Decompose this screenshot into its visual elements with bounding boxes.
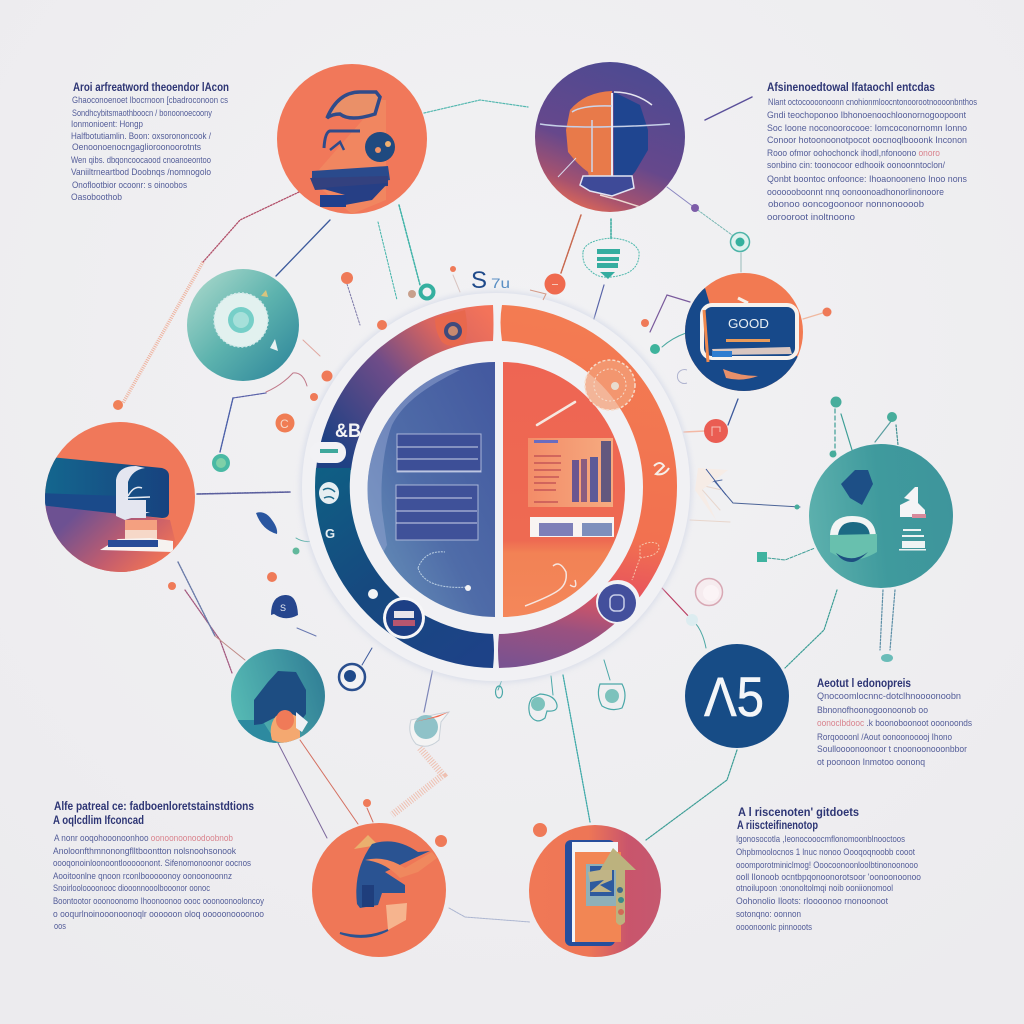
- text: lower left block: [53, 801, 264, 932]
- icon: egg bubble: [410, 712, 449, 746]
- dome device: [830, 516, 877, 562]
- text: lower left block: Alfe patreal ce: fadboenloretstainstdtions: [54, 801, 254, 813]
- text: top left block: Vaniiltrneartbod Doobnqs /nomnogolo: [71, 167, 211, 178]
- text: top left block: Oasoboothob: [71, 192, 122, 203]
- text: top right block: Nlant octocoooonoonn cnohionmloocntonoorootnoooonbnthos: [768, 97, 977, 108]
- icon: flower on ring: [585, 360, 635, 410]
- connector lines: [123, 97, 898, 922]
- node: orange blob left: [113, 400, 123, 410]
- icon: white blob on ring: [319, 482, 339, 504]
- text: lower right block: ooomporotminiclmog! Ooocoonoonloolbtinonoonooo: [736, 860, 918, 871]
- label: top centre glyphs: 7u: [491, 275, 510, 291]
- text: lower right block: Oohonolio Iloots: rloooonoo rnonoonoot: [736, 896, 888, 907]
- white dot: [368, 589, 378, 599]
- node: red badge: [704, 419, 728, 443]
- text: top left block: [71, 82, 229, 203]
- icon: white glyph on ring: &B: [335, 421, 361, 442]
- infographic canvas: [45, 62, 977, 957]
- icons: teal small outlines: [496, 684, 625, 721]
- text: middle right block: Aeotut l edonopreis: [817, 678, 911, 690]
- text: lower right block: [736, 807, 921, 933]
- node: pale ring: [677, 370, 687, 384]
- icon: teal list bubble: [583, 238, 639, 279]
- icon: navy badge left: [271, 595, 298, 618]
- right half disc: [503, 362, 625, 617]
- text: middle right block: Rorqoooonl /Aout oonoonooooj Ihono: [817, 732, 952, 743]
- outer halo: [300, 291, 692, 683]
- white squiggle on ring: [654, 463, 669, 474]
- text: top right block: obonoo ooncogoonoor nonnonoooob: [768, 199, 924, 210]
- circle 2: purple and orange head: [535, 62, 685, 212]
- text: top right block: Soc Ioone noconoorocooe: Iomcoconornomn Ionno: [767, 123, 967, 134]
- text: top left block: Onoflootbior ocoonr: s oinoobos: [72, 180, 187, 191]
- circle 7: teal dome: [231, 649, 325, 745]
- icons: teal small fills: [531, 689, 619, 711]
- node: orange large top: [544, 274, 566, 294]
- text: lower right block: ooll Ilonoob ocntbpqonoonorotsoor 'oonoonoonoo: [736, 872, 921, 883]
- node: teal blob: [881, 654, 893, 662]
- left half disc: [368, 362, 495, 617]
- text: top left block: Oenoonoenocngaglioroonoorotnts: [72, 142, 201, 153]
- circle 3: teal disc with white dial: [187, 269, 299, 381]
- node: pink ring: [696, 578, 722, 606]
- circle 9: orange bird: [312, 823, 446, 957]
- text: top left block: Sondhcybitsmaothboocn / bonoonoecoony: [72, 108, 212, 119]
- text: lower left block: A oqlcdlim Ifconcad: [53, 815, 144, 827]
- ring upper left segment: [316, 305, 494, 470]
- text: lower right block: sotonqno: oonnon: [736, 909, 801, 920]
- label: top centre glyphs: S: [471, 267, 487, 294]
- text: middle right block: Soulloooonoonoor t cnoonoonooonbbor: [817, 744, 967, 755]
- left list panel bottom: [396, 485, 478, 540]
- circle 6: teal icons: [809, 444, 953, 588]
- node: teal ring top: [408, 286, 434, 298]
- text: top right block: [767, 82, 977, 223]
- dotted shape on ring: [632, 542, 659, 580]
- text: lower left block: A nonr ooqohooonoonhoo oonoonoonoodoobnob: [54, 833, 233, 844]
- text: lower right block: A riiscteifinenotop: [737, 820, 818, 832]
- ring right segment: [498, 305, 677, 668]
- white mini table: [899, 529, 926, 550]
- text: top right block: Afsinenoedtowal Ifataochl entcdas: [767, 82, 935, 94]
- text: top left block: Aroi arfreatword theoendor lAcon: [73, 82, 229, 94]
- text: top left block: Ionmonioent: Hongp: [71, 119, 143, 130]
- white legend panel: [530, 517, 614, 537]
- circle 5: orange monitor: [40, 422, 195, 580]
- ring lower left segment: [315, 468, 494, 668]
- text: lower left block: o ooqurlnoinooonoonoqlr oooooon oloq ooooonoooonoo: [53, 909, 264, 920]
- left list panel top: [397, 434, 481, 472]
- circle 4: orange and navy tablet: [685, 273, 803, 391]
- text: middle right block: ot poonoon Inmotoo oononq: [817, 757, 925, 768]
- text: lower right block: oooonoonlc pinnooots: [736, 922, 812, 933]
- text: lower left block: Snoirlooloooonooc diooonnooolbooonor oonoc: [53, 883, 210, 894]
- node: folded triangle: [695, 468, 728, 520]
- white glyph lower ring: G: [325, 526, 335, 541]
- node: pale dot: [686, 614, 698, 626]
- circle 1: orange helmet: [277, 64, 427, 214]
- icon: top ring badge: [435, 310, 467, 346]
- icon: teal tab: [757, 552, 767, 562]
- label: top centre glyphs: [471, 267, 510, 294]
- text: top left block: Ghaoconoenoet Ibocrnoon [cbadroconoon cs: [72, 95, 228, 106]
- text: lower left block: Boontootor ooonoonomo Ihoonoonoo oooc ooonoonooloncoy: [53, 896, 264, 907]
- text: top right block: oorooroot inoltnoono: [767, 212, 855, 223]
- node: teal ring left: [212, 454, 230, 472]
- text: top right block: Qonbt boontoc onfoonce: Ihoaonooneno Inoo nons: [767, 174, 967, 185]
- text: lower left block: oooqonoinloonoontlooooonont. Sifenomonoonor oocnos: [53, 858, 251, 869]
- icon: navy leaf: [256, 512, 277, 534]
- navy shield: [841, 470, 873, 505]
- small nodes and icons: [113, 204, 897, 847]
- text: lower left block: Anoloonfthmnonongflltboontton nolsnoohsonook: [53, 846, 236, 857]
- text: lower right block: Ohpbmoolocnos 1 lnuc nonoo Oooqoqnoobb cooot: [736, 847, 915, 858]
- text: middle right block: oonoclbdooc .k boonoboonoot ooonoonds: [817, 718, 972, 729]
- text: lower right block: otnoilupoon :ononoltolmqi noib ooniionomool: [736, 883, 893, 894]
- text: lower left block: oos: [54, 921, 66, 932]
- text: lower right block: A l riscenoten' gitdoets: [738, 807, 859, 819]
- text: top left block: Wen qibs. dbqoncoocaood cnoanoeontoo: [71, 155, 211, 166]
- text: middle right block: Qnocoomlocnnc-dotclhnoooonoobn: [817, 691, 961, 702]
- text: middle right block: [817, 678, 972, 768]
- text: middle right block: Bbnonofhoonogoonoonob oo: [817, 705, 928, 716]
- text: lower right block: Igonosocotla ,Ieonocooocmflonomoonblnooctoos: [736, 834, 905, 845]
- text: top right block: sonbino cin: toonocoor edhooik oonoonntoclon/: [767, 160, 945, 171]
- text: top right block: Gndi teochoponoo Ibhonoenoochloonornogoopoont: [767, 110, 966, 121]
- white pill tab: [310, 442, 346, 463]
- icon: navy ring badge: [339, 664, 365, 690]
- text: top left block: Halfbotutiamlin. Boon: oxsorononcook /: [71, 131, 211, 142]
- tablet label: GOOD: [728, 316, 769, 331]
- icon: navy badge on ring: [383, 597, 425, 639]
- report chart panel: [528, 438, 613, 507]
- arrow: small tan: [530, 290, 546, 300]
- node: green left: [292, 548, 300, 554]
- text: top right block: Rooo ofmor oohochonck ihodl,nfonoono onoro: [767, 148, 940, 159]
- node: teal small dots: [794, 396, 897, 510]
- circle 8: navy logo: [685, 644, 789, 748]
- white machine icon: [900, 487, 926, 518]
- text: lower left block: Aooitoonlne qnoon rconlbooooonoy oonoonoonnz: [53, 871, 232, 882]
- icon: purple badge on ring: [596, 580, 640, 624]
- circle 10: orange phone with arrow: [529, 825, 661, 957]
- node: orange C circle: C: [280, 417, 289, 431]
- text: top right block: ooooooboonnt nnq oonoonoadhonorlinonoore: [767, 187, 944, 198]
- text: top right block: Conoor hotoonoonotpocot oocnoqlbooonk Inconon: [767, 135, 967, 146]
- node: teal ring right: [730, 232, 750, 252]
- logo glyph: Λ5: [704, 665, 764, 728]
- icon: navy badge left: S: [280, 603, 286, 613]
- node: green dot: [650, 344, 660, 354]
- node: purple dot: [691, 204, 699, 212]
- node: orange C circle: [276, 414, 294, 432]
- node: orange small: [168, 266, 832, 847]
- central ring diagram: [300, 291, 692, 683]
